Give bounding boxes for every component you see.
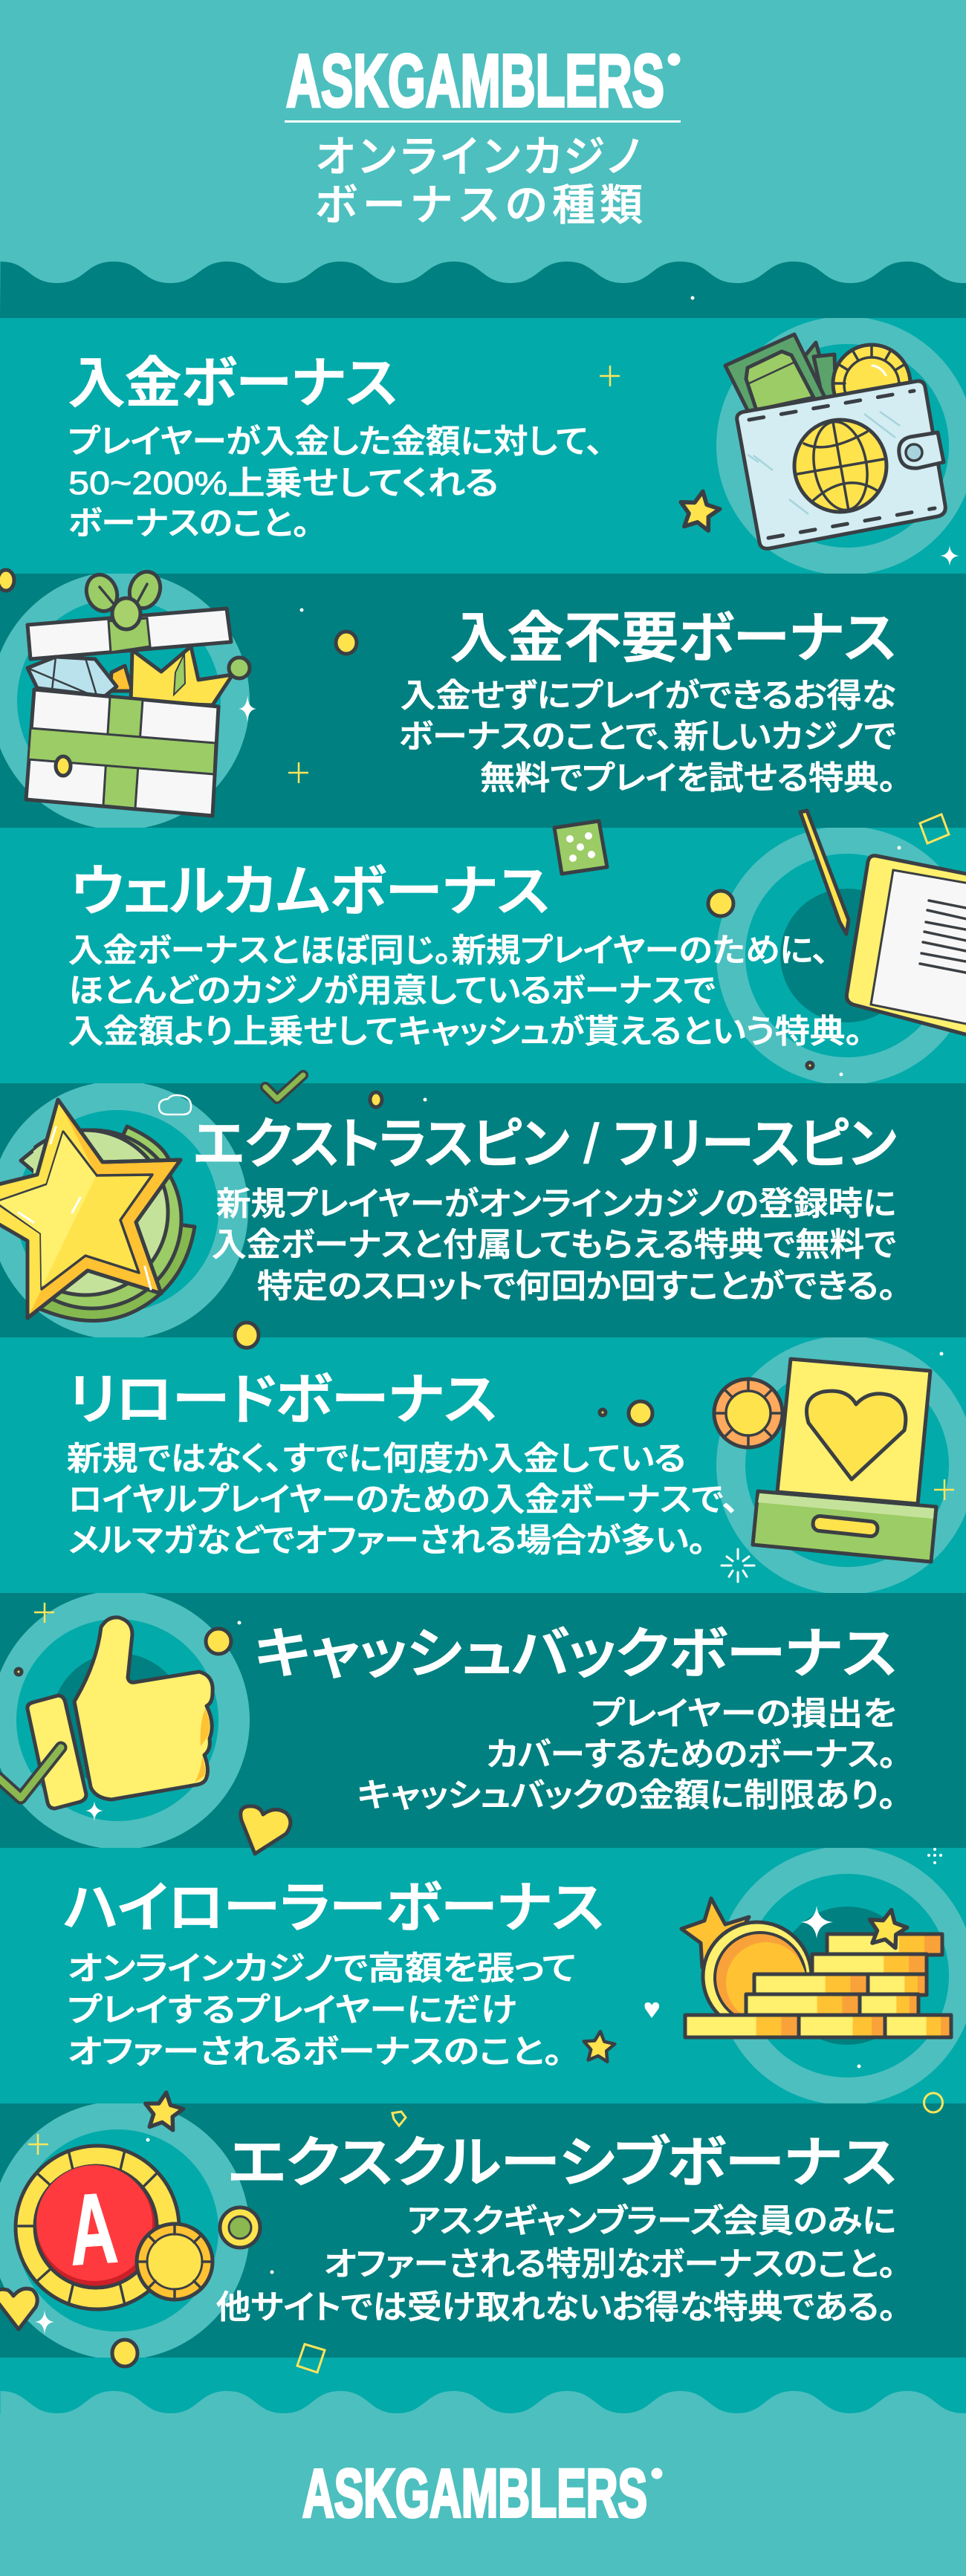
title: ボーナスの種類: [315, 181, 643, 230]
heading: キャッシュバックボーナス: [255, 1623, 896, 1684]
rings: [0, 2101, 250, 2360]
coin: [235, 1323, 259, 1348]
dots cluster: [927, 1848, 942, 1864]
heading: ウェルカムボーナス: [71, 860, 549, 922]
body text: 特定のスロットで何回か回すことができる。: [257, 1268, 896, 1305]
header rule: [285, 120, 681, 123]
white dot: [300, 608, 303, 612]
body text: カバーするためのボーナス。: [486, 1736, 896, 1773]
panel: リロードボーナス: [67, 1336, 966, 1594]
body text: 新規ではなく、すでに何度か入金している: [67, 1441, 686, 1477]
body text: 50~200%上乗せしてくれる: [68, 465, 499, 502]
coin: [112, 2340, 137, 2366]
icon: star: [677, 488, 722, 532]
coin: [708, 891, 733, 916]
body text: 新規プレイヤーがオンラインカジノの登録時に: [216, 1186, 896, 1222]
small coin: [16, 1669, 22, 1675]
body text: メルマガなどでオファーされる場合が多い。: [68, 1522, 706, 1559]
coin: [336, 632, 357, 654]
icon: small green chip: [220, 2207, 260, 2248]
icon: heart card: [753, 1359, 936, 1562]
body text: 他サイトでは受け取れないお得な特典である。: [216, 2289, 896, 2326]
sparkle: [239, 695, 256, 722]
body text: ほとんどのカジノが用意しているボーナスで: [68, 973, 716, 1009]
sparkle burst: [722, 1549, 754, 1582]
cuff: [27, 1696, 86, 1808]
plus: [288, 762, 308, 783]
body text: [68, 1950, 577, 2070]
icon: star: [583, 2030, 616, 2063]
body text: [68, 932, 863, 1050]
bow: [82, 571, 122, 615]
check mark: [265, 1075, 303, 1099]
body text: [68, 424, 603, 542]
icon: small star on stack: [865, 1906, 910, 1950]
panel: キャッシュバックボーナス: [0, 1591, 896, 1854]
white dot: [939, 1352, 944, 1355]
white dot: [424, 1098, 427, 1101]
body text: 入金額より上乗せしてキャッシュが貰えるという特典。: [68, 1013, 863, 1050]
icon: heart: [241, 1806, 291, 1854]
plus: [34, 1603, 54, 1623]
panel: エクスクルーシブボーナス: [0, 2090, 896, 2372]
panel: エクストラスピン / フリースピン: [0, 1075, 896, 1348]
white dot: [858, 2064, 860, 2069]
icon: chip: [714, 1379, 782, 1447]
rings: [716, 317, 966, 575]
small heart: [645, 2002, 659, 2018]
plus: [28, 2134, 48, 2155]
rings: [0, 571, 250, 830]
sparkle: [801, 1906, 833, 1939]
panel: ハイローラーボーナス: [64, 1846, 966, 2112]
lid: [27, 609, 231, 659]
footer logo: ASKGAMBLERS: [302, 2456, 647, 2531]
icon: star with coins: [0, 1100, 195, 1321]
panel: 入金不要ボーナス: [0, 568, 896, 830]
sparkle: [940, 545, 959, 566]
check mark fill: [265, 1075, 303, 1099]
body text: アスクギャンブラーズ会員のみに: [407, 2203, 896, 2239]
icon: star: [143, 2090, 185, 2131]
heading: 入金ボーナス: [68, 352, 397, 414]
white dots: [840, 846, 901, 1076]
small white dot: [691, 296, 694, 300]
coin at left edge: [0, 570, 14, 591]
body text: 入金ボーナスとほぼ同じ。新規プレイヤーのために、: [68, 932, 829, 969]
body text: [212, 1186, 896, 1305]
cloud outline: [159, 1095, 191, 1115]
contents: [110, 666, 132, 691]
icon: pencil: [800, 811, 849, 934]
rings: [716, 1846, 966, 2105]
coins: [600, 1401, 652, 1425]
body text: ボーナスのこと。: [68, 505, 310, 542]
icon: casino chip with A: [16, 2146, 179, 2309]
rings: [716, 1336, 966, 1594]
outline diamond: [297, 2344, 325, 2372]
notes: [798, 343, 836, 416]
clasp: [899, 432, 944, 468]
body text: オファーされる特別なボーナスのこと。: [324, 2246, 896, 2283]
heading: リロードボーナス: [68, 1369, 496, 1430]
wallet body: [737, 381, 945, 548]
small coin: [807, 1062, 813, 1068]
bottom wave footer: [0, 2391, 966, 2576]
logo registered dot: [667, 53, 681, 65]
check: [0, 1748, 61, 1798]
rings: [716, 826, 966, 1085]
icon: gift box: [26, 568, 250, 816]
outline gem: [392, 2112, 406, 2126]
icon: thumbs up: [0, 1618, 213, 1808]
body text: ロイヤルプレイヤーのための入金ボーナスで、: [68, 1482, 739, 1518]
panel: ウェルカムボーナス: [68, 811, 966, 1085]
icon: dice: [554, 821, 607, 874]
sparkle: [35, 2310, 54, 2335]
body text: [357, 1696, 896, 1814]
heading: ハイローラーボーナス: [64, 1877, 603, 1939]
coin: [370, 1092, 382, 1107]
heading: 入金不要ボーナス: [450, 607, 895, 669]
yellow ring: [924, 2093, 942, 2112]
plus: [934, 1479, 954, 1500]
coin: [833, 345, 910, 422]
hand: [74, 1618, 213, 1800]
body text: オファーされるボーナスのこと。: [68, 2034, 563, 2070]
title: オンラインカジノ: [315, 133, 646, 181]
icon: heart: [0, 2288, 37, 2329]
shading: [195, 1709, 210, 1782]
panel: 入金ボーナス: [68, 317, 966, 575]
plus: [600, 366, 620, 386]
icon: tablet: [846, 856, 966, 1036]
header: [285, 39, 681, 230]
icon: gold coin: [137, 2224, 213, 2300]
top wave band: [0, 262, 966, 318]
coin: [206, 1629, 231, 1654]
body text: [399, 678, 896, 797]
body text: 入金ボーナスと付属してもらえる特典で無料で: [212, 1227, 896, 1263]
body text: プレイするプレイヤーにだけ: [68, 1992, 517, 2028]
heading: エクストラスピン / フリースピン: [193, 1113, 896, 1175]
title: [315, 133, 646, 230]
rings: [0, 1591, 250, 1849]
heading: エクスクルーシブボーナス: [228, 2132, 896, 2193]
body text: プレイヤーの損出を: [591, 1696, 896, 1732]
icon: casino chip with A: A: [65, 2173, 120, 2286]
box: [26, 690, 218, 816]
logo: AskGamblers: ASKGAMBLERS: [286, 39, 664, 123]
icon: coin stack: [681, 1898, 951, 2037]
footer logo: [302, 2456, 663, 2531]
body text: キャッシュバックの金額に制限あり。: [357, 1777, 896, 1814]
body text: 入金せずにプレイができるお得な: [401, 678, 896, 714]
body text: プレイヤーが入金した金額に対して、: [68, 424, 603, 460]
rings: [0, 1081, 248, 1340]
body text: [67, 1441, 739, 1559]
body text: [216, 2203, 896, 2326]
sparkle: [85, 1801, 103, 1821]
globe: [794, 420, 886, 512]
white dot: [238, 1621, 241, 1624]
outline diamond: [920, 814, 949, 843]
icon: wallet: [725, 334, 945, 548]
white dots: [146, 2138, 273, 2274]
body text: オンラインカジノで高額を張って: [68, 1950, 577, 1987]
body text: 無料でプレイを試せる特典。: [480, 760, 896, 797]
body text: ボーナスのことで、新しいカジノで: [399, 718, 896, 755]
